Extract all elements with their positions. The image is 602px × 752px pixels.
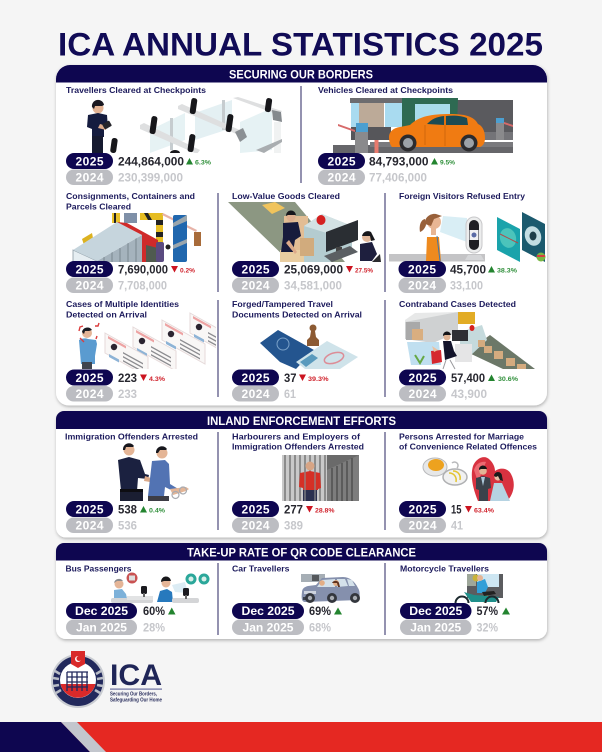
month pills [232, 603, 304, 635]
stat: multiple identities [66, 301, 216, 402]
figures: 28.8% [315, 508, 335, 514]
figures: 9.5% [440, 160, 455, 166]
figures: 39.3% [308, 376, 329, 383]
icon: goods conveyor and officer [228, 202, 381, 262]
figures [476, 604, 510, 634]
icon: traveller and gates [87, 97, 282, 156]
figures: 536 [118, 518, 137, 532]
stat: forged documents [232, 299, 362, 402]
logo: ICA wordmark and tagline: Safeguarding Our Home [110, 698, 162, 704]
figures: 277 [284, 502, 303, 516]
year pills: 2024 [242, 387, 270, 401]
year pills: 2025 [76, 371, 104, 385]
figures [118, 154, 211, 184]
stat: bus passengers: Bus Passengers [66, 564, 132, 574]
panel: take-up rate of qr code clearance [56, 543, 547, 639]
heading: take-up rate [56, 543, 547, 560]
stat: marriage of convenience: of Convenience Related Offences [399, 442, 537, 452]
stat: immigration offenders: Immigration Offenders Arrested [65, 432, 198, 442]
year pills: 2025 [76, 502, 104, 516]
figures: 7,708,000 [118, 278, 167, 292]
icon: car with travellers [301, 574, 360, 603]
month pills: Dec 2025 [242, 604, 295, 618]
figures [451, 502, 494, 532]
icon: bus passengers at gates [111, 572, 210, 603]
panel: inland enforcement efforts [56, 411, 547, 538]
year pills: 2025 [408, 371, 437, 385]
stat: consignments [66, 191, 201, 293]
logo: ICA wordmark and tagline: Securing Our Borders, [110, 692, 158, 698]
figures: 61 [284, 387, 296, 401]
year pills: 2024 [408, 387, 437, 401]
figures: 63.4% [474, 508, 494, 514]
year pills: 2025 [242, 262, 270, 276]
stat: marriage of convenience: Persons Arrested for Marriage [399, 432, 524, 442]
footer colour band [0, 722, 602, 752]
stat: marriage of convenience [399, 432, 537, 533]
icon: biometric scanner [389, 212, 546, 262]
figures: 38.3% [497, 268, 517, 274]
icon: motorcyclist [454, 574, 503, 603]
year pills [232, 261, 279, 293]
figures: 43,900 [451, 387, 487, 401]
figures: 34,581,000 [284, 278, 342, 292]
month pills [66, 603, 137, 635]
figures: 32% [476, 620, 498, 634]
figures [284, 502, 335, 532]
figures: 538 [118, 502, 137, 516]
year pills: 2025 [408, 262, 436, 276]
icon: officer and offender [118, 443, 189, 501]
month pills [400, 603, 472, 635]
icon: contraband inspection [405, 312, 535, 369]
stat: forged documents: Documents Detected on Arrival [232, 310, 362, 320]
year pills [66, 501, 113, 533]
icon: container truck scanner [73, 213, 201, 262]
stat: car travellers [232, 564, 360, 635]
figures: 45,700 [450, 262, 486, 276]
stat: low-value goods: Low-Value Goods Cleared [232, 191, 340, 201]
figures [309, 604, 342, 634]
year pills: 2024 [328, 170, 356, 184]
stat: harbourers and employers [232, 432, 364, 533]
month pills: Jan 2025 [76, 620, 127, 634]
figures [284, 262, 373, 292]
figures: 68% [309, 620, 331, 634]
year pills [399, 370, 446, 402]
year pills: 2025 [328, 154, 356, 168]
year pills: 2025 [76, 262, 104, 276]
stat: low-value goods [228, 191, 381, 293]
month pills: Jan 2025 [242, 620, 294, 634]
figures: 7,690,000 [118, 262, 168, 276]
figures [118, 262, 195, 292]
month pills: Jan 2025 [410, 620, 462, 634]
figures [143, 604, 176, 634]
icon: rings and couple [423, 457, 514, 501]
heading: inland enforcement: INLAND ENFORCEMENT EFFORTS [207, 416, 396, 428]
stat: consignments: Consignments, Containers and [66, 191, 195, 201]
stat: multiple identities: Cases of Multiple Identities [66, 299, 179, 309]
year pills [399, 501, 446, 533]
stat: travellers cleared [66, 85, 282, 185]
figures [118, 371, 165, 401]
figures: 0.2% [180, 268, 195, 274]
title: ICA ANNUAL STATISTICS 2025 [58, 26, 543, 62]
figures [284, 371, 329, 401]
figures: 30.6% [498, 376, 518, 383]
stat: vehicles cleared [318, 85, 513, 185]
year pills: 2024 [408, 278, 436, 292]
year pills: 2024 [76, 387, 104, 401]
year pills [66, 370, 113, 402]
stat: foreign visitors refused: Foreign Visitors Refused Entry [399, 191, 525, 201]
stat: harbourers and employers: Harbourers and Employers of [232, 432, 360, 442]
figures: 230,399,000 [118, 170, 183, 184]
figures: 6.3% [195, 160, 211, 166]
figures [369, 154, 455, 184]
year pills [398, 261, 446, 293]
heading: inland enforcement [56, 411, 547, 429]
year pills: 2025 [242, 371, 270, 385]
figures: 60% [143, 604, 165, 618]
heading: take-up rate: TAKE-UP RATE OF QR CODE CLEARANCE [187, 547, 416, 559]
heading: securing our borders: SECURING OUR BORDERS [229, 70, 373, 82]
year pills [232, 370, 279, 402]
stat: harbourers and employers: Immigration Offenders Arrested [232, 442, 364, 452]
heading: securing our borders [56, 65, 547, 82]
stat: motorcycle travellers [400, 564, 510, 635]
year pills [232, 501, 279, 533]
stat: consignments: Parcels Cleared [66, 202, 131, 212]
figures: 233 [118, 387, 137, 401]
month pills: Dec 2025 [75, 604, 128, 618]
figures: 69% [309, 604, 331, 618]
year pills [66, 261, 113, 293]
figures: 57% [476, 604, 498, 618]
month pills: Dec 2025 [409, 604, 463, 618]
stat: travellers cleared: Travellers Cleared at Checkpoints [66, 85, 206, 95]
year pills [318, 153, 365, 185]
icon: person and identity cards [78, 312, 216, 369]
figures [450, 262, 517, 292]
figures: 77,406,000 [369, 170, 427, 184]
year pills: 2025 [408, 502, 437, 516]
year pills: 2024 [408, 518, 437, 532]
logo: ICA crest [51, 651, 105, 708]
figures: 28% [143, 620, 165, 634]
stat: forged documents: Forged/Tampered Travel [232, 299, 333, 309]
year pills: 2024 [76, 518, 104, 532]
stat: contraband: Contraband Cases Detected [399, 299, 516, 309]
year pills: 2024 [242, 278, 270, 292]
logo: ICA wordmark and tagline: ICA [110, 659, 162, 692]
figures: 0.4% [149, 508, 165, 514]
icon: passport and stamp [260, 324, 358, 369]
figures: 244,864,000 [118, 154, 184, 168]
stat: immigration offenders [65, 432, 198, 533]
stat: multiple identities: Detected on Arrival [66, 310, 147, 320]
figures: 33,100 [450, 278, 483, 292]
year pills: 2025 [242, 502, 270, 516]
figures: 27.5% [355, 268, 373, 274]
icon: offender behind bars [282, 455, 359, 501]
figures [118, 502, 165, 532]
stat: contraband [399, 299, 535, 402]
stat: motorcycle travellers: Motorcycle Travellers [400, 564, 489, 574]
figures: 25,069,000 [284, 262, 343, 276]
figures: 4.3% [149, 376, 165, 383]
figures: 41 [451, 518, 463, 532]
stat: car travellers: Car Travellers [232, 564, 290, 574]
panel: securing our borders [56, 65, 547, 406]
year pills: 2024 [76, 170, 104, 184]
figures: 57,400 [451, 371, 485, 385]
figures: 37 [284, 371, 297, 385]
year pills: 2024 [242, 518, 270, 532]
figures: 223 [118, 371, 137, 385]
stat: bus passengers [66, 564, 210, 635]
figures: 15 [451, 502, 462, 516]
figures: 389 [284, 518, 303, 532]
stat: foreign visitors refused [389, 191, 546, 293]
year pills [66, 153, 113, 185]
icon: car at checkpoint [333, 98, 513, 153]
year pills: 2025 [76, 154, 104, 168]
figures [451, 371, 518, 401]
year pills: 2024 [76, 278, 104, 292]
figures: 84,793,000 [369, 154, 429, 168]
stat: vehicles cleared: Vehicles Cleared at Checkpoints [318, 85, 453, 95]
